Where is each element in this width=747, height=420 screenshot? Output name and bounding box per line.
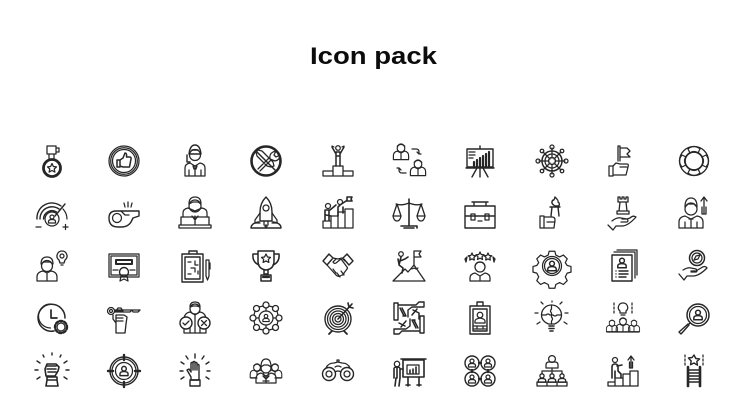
icon: climbing team [323,197,353,228]
icon: certificate [109,254,139,281]
title: Icon pack [310,43,437,70]
icon: presenter with board [394,359,426,386]
icon: presentation chart [466,146,494,177]
icon: ship wheel [536,145,568,177]
icon: mountain climber [393,251,425,281]
icon: clock with gear [38,304,67,333]
icon: target with arrow [325,303,353,334]
icon: podium winner [323,146,353,176]
icon: gauge person [36,203,68,230]
icon: magnifier person [679,304,709,334]
icon: whistle [109,202,139,227]
icon: crosshair person [108,355,140,387]
icon: network hub [250,302,282,334]
icon: team idea [606,303,640,332]
icon: speaker at podium [179,197,211,228]
icon: hand holding flag [609,146,630,176]
icon: binoculars [322,360,354,380]
icon: resume stack [612,250,637,281]
icon: briefcase [465,202,495,228]
icon: puzzle lightbulb [535,301,568,331]
icon: org pyramid [537,356,567,386]
icon: fist with rays [35,353,69,386]
icon: handshake [323,254,353,277]
icon: decision person [180,302,210,333]
icon: four connected people [465,356,495,386]
icon: hand with torch [540,197,560,228]
icon: clipboard plan [182,251,210,282]
icon: person with idea [37,251,67,281]
icon: thumbs up badge [109,146,139,176]
icon: no tools [252,146,280,176]
icon: balance scales [393,199,425,228]
icon: support woman [185,145,205,176]
icon grid [35,144,709,387]
icon: team group [250,359,282,383]
icon: team hands square [394,302,424,334]
icon: rocket launch [251,197,281,228]
icon: raised hand with rays [180,354,210,386]
icon: people exchange [393,144,426,176]
icon: gear person [533,251,571,288]
icon: star ladder [685,355,703,386]
icon: compass on hand [679,250,707,280]
icon: lifebuoy [680,146,708,176]
icon: stairs with arrow [608,356,638,386]
icon: chess rook on hand [608,197,636,230]
icon: five star employee [465,252,495,281]
icon: id badge [470,302,490,334]
icon: trophy [253,251,279,281]
icon: medal [44,146,60,176]
icon: hand with key [108,308,140,333]
icon: manager promotion [679,197,707,228]
